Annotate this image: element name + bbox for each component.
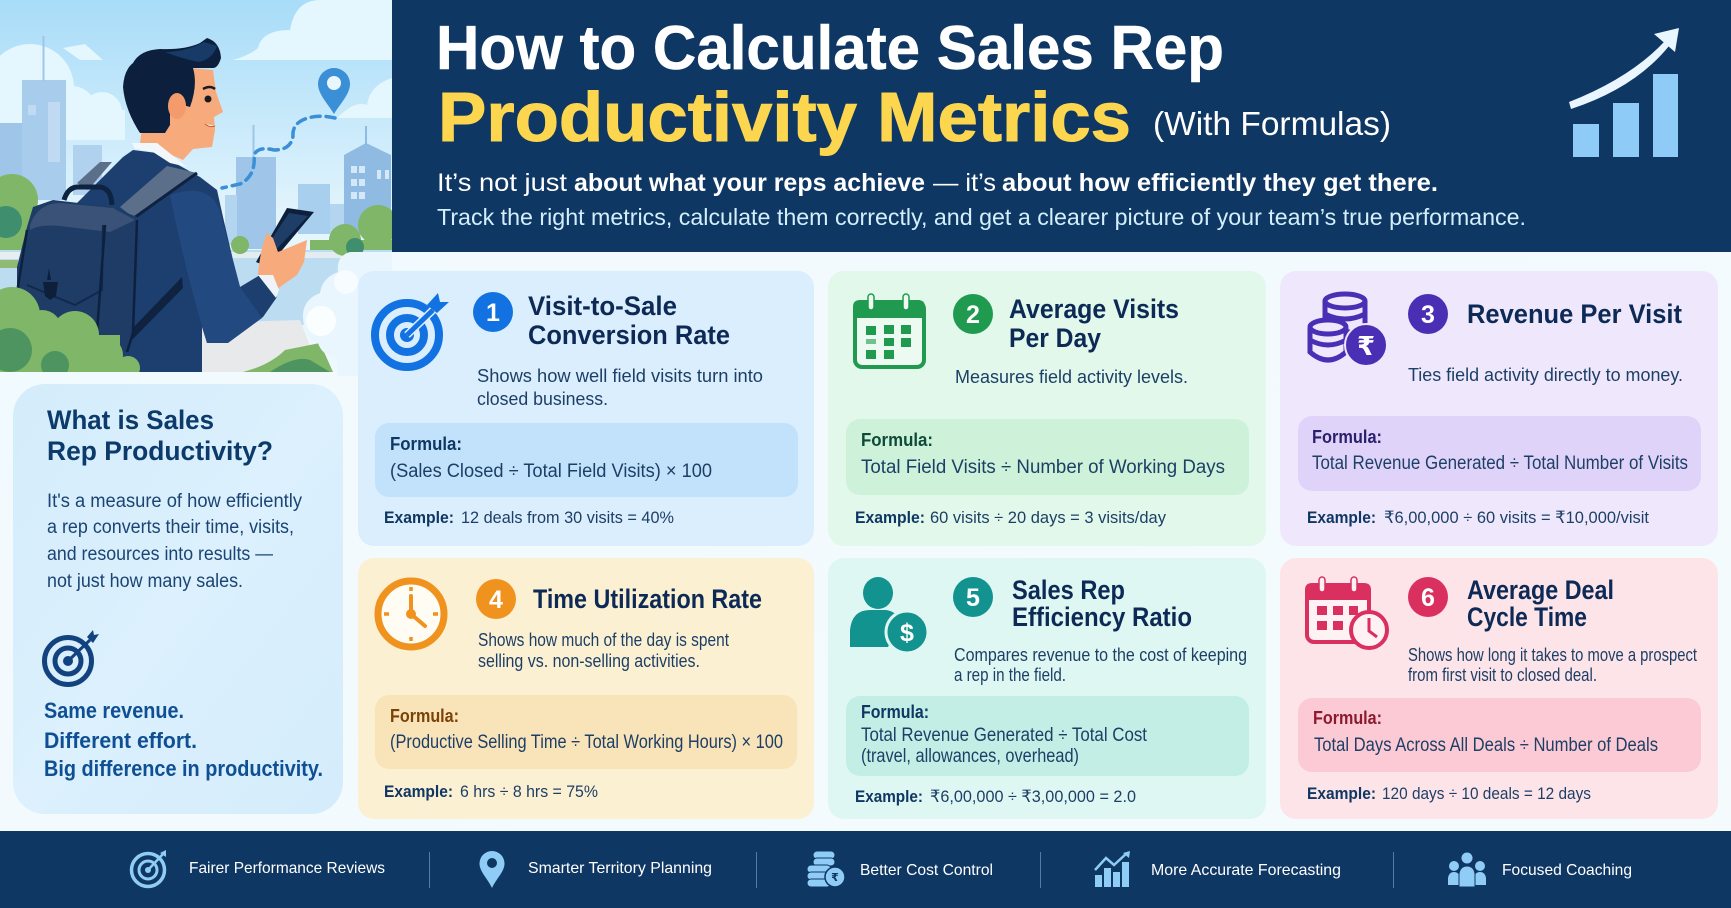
card title: Visit-to-Sale	[528, 291, 677, 321]
number badge 2	[953, 294, 993, 334]
card description: a rep in the field.	[954, 665, 1066, 685]
card title: Sales Rep	[1012, 575, 1125, 605]
formula box: Formula:	[1312, 427, 1382, 447]
number badge 6	[1408, 577, 1448, 617]
footer item: smarter territory planning: Smarter Territory Planning	[528, 860, 712, 877]
card title: Conversion Rate	[528, 320, 730, 350]
formula box	[846, 696, 1249, 776]
formula box	[375, 423, 798, 497]
card description	[1408, 645, 1697, 685]
card title: Efficiency Ratio	[1012, 602, 1192, 632]
card title: Revenue Per Visit	[1467, 299, 1682, 329]
ground and water	[0, 250, 392, 325]
formula box: Total Days Across All Deals ÷ Number of Deals	[1314, 735, 1658, 756]
icon: person with dollar: $	[900, 619, 914, 647]
card title	[1012, 575, 1192, 632]
backpack	[17, 200, 140, 352]
footer bar	[0, 831, 1731, 908]
footer item: smarter territory planning	[480, 851, 712, 888]
example: Example:	[855, 787, 923, 806]
panel: card 2 average visits per day	[828, 271, 1266, 546]
example: 120 days ÷ 10 deals = 12 days	[1382, 784, 1591, 803]
panel: card 1 visit-to-sale	[358, 271, 814, 546]
panel: what is sales rep productivity	[13, 384, 343, 814]
formula box	[375, 695, 797, 769]
example: Example:	[384, 782, 453, 801]
panel: card 3 revenue per visit	[1280, 271, 1718, 546]
title suffix: (With Formulas)	[1153, 105, 1391, 142]
number badge 4: 4	[489, 586, 503, 614]
panel heading: What is Sales	[47, 405, 214, 435]
example: 6 hrs ÷ 8 hrs = 75%	[460, 782, 598, 801]
card description	[477, 366, 763, 409]
hair	[123, 38, 221, 133]
formula box: Formula:	[861, 702, 929, 722]
card title: Cycle Time	[1467, 602, 1587, 632]
footer item: better cost control: ₹	[831, 872, 839, 884]
panel description: not just how many sales.	[47, 571, 243, 592]
card description	[954, 645, 1247, 685]
card title: Average Visits	[1009, 294, 1179, 324]
hand and cuff	[258, 233, 307, 289]
card description: Compares revenue to the cost of keeping	[954, 645, 1247, 665]
formula box: (Sales Closed ÷ Total Field Visits) × 100	[390, 461, 712, 482]
icon: coins with rupee: ₹	[1357, 331, 1375, 361]
subtitle line 1: — it’s	[933, 169, 996, 197]
number badge 3: 3	[1421, 301, 1435, 329]
panel description: It's a measure of how efficiently	[47, 491, 302, 512]
footer item: fairer performance reviews	[132, 850, 385, 886]
panel takeaway: Different effort.	[44, 728, 197, 753]
subtitle line 1	[437, 169, 1438, 197]
formula box	[1298, 698, 1701, 772]
subtitle line 1: It’s not just	[437, 169, 567, 197]
number badge 5: 5	[966, 584, 980, 612]
formula box: Total Revenue Generated ÷ Total Number of Visits	[1312, 453, 1688, 474]
formula box: Formula:	[861, 430, 933, 450]
location pin	[318, 68, 350, 114]
neck and face	[140, 68, 223, 160]
example: ₹6,00,000 ÷ ₹3,00,000 = 2.0	[930, 787, 1136, 806]
card description: Shows how much of the day is spent	[478, 630, 729, 650]
number badge 2: 2	[966, 301, 980, 329]
number badge 1	[473, 292, 513, 332]
suit body	[60, 150, 277, 372]
card title: Average Deal	[1467, 575, 1614, 605]
footer item: focused coaching	[1448, 852, 1632, 887]
bushes	[0, 174, 398, 256]
example: 60 visits ÷ 20 days = 3 visits/day	[930, 508, 1166, 527]
icon: growth chart	[1569, 28, 1679, 157]
card title: Per Day	[1009, 323, 1101, 353]
illustration: sales rep in city	[0, 0, 398, 380]
card description	[478, 630, 729, 671]
buildings	[0, 36, 391, 249]
panel heading	[47, 405, 273, 466]
icon: coins with rupee	[1310, 294, 1387, 366]
icon: calendar with clock	[1305, 577, 1387, 648]
panel takeaway	[44, 698, 323, 781]
example: ₹6,00,000 ÷ 60 visits = ₹10,000/visit	[1384, 508, 1649, 527]
card description: selling vs. non-selling activities.	[478, 651, 700, 671]
footer item: better cost control: Better Cost Control	[860, 862, 993, 879]
title line 2: Productivity Metrics	[438, 78, 1131, 156]
card title	[1467, 575, 1614, 632]
example: Example:	[1307, 784, 1376, 803]
footer item: better cost control	[807, 851, 993, 887]
formula box: Formula:	[1313, 708, 1382, 728]
phone	[256, 208, 314, 267]
card title: Time Utilization Rate	[533, 584, 762, 614]
panel: card 6 deal cycle time	[1280, 558, 1718, 819]
example	[1307, 784, 1591, 803]
footer item: focused coaching: Focused Coaching	[1502, 862, 1632, 879]
panel takeaway: Same revenue.	[44, 698, 184, 723]
card description: from first visit to closed deal.	[1408, 665, 1597, 685]
icon: calendar	[853, 294, 925, 367]
formula box: (travel, allowances, overhead)	[861, 746, 1079, 767]
card description: Ties field activity directly to money.	[1408, 365, 1683, 385]
panel: card 5 efficiency ratio	[828, 558, 1266, 819]
example: Example:	[1307, 508, 1376, 527]
icon: clock	[378, 581, 444, 647]
formula box	[1298, 416, 1701, 491]
example	[384, 782, 598, 801]
number badge 3	[1408, 294, 1448, 334]
panel: card 4 time utilization	[358, 558, 814, 819]
footer item: fairer performance reviews: Fairer Performance Reviews	[189, 860, 385, 877]
number badge 1: 1	[486, 299, 500, 327]
title line 1: How to Calculate Sales Rep	[436, 14, 1224, 83]
example: Example:	[384, 508, 454, 527]
footer item: more accurate forecasting: More Accurate Forecasting	[1151, 862, 1341, 879]
formula box: (Productive Selling Time ÷ Total Working Hours) × 100	[390, 732, 783, 753]
foreground bushes	[0, 287, 333, 380]
cloud overlay bottom right of illustration	[303, 252, 392, 376]
header banner	[392, 0, 1731, 252]
number badge 4	[476, 579, 516, 619]
route dashed line	[222, 116, 335, 188]
subtitle line 2: Track the right metrics, calculate them correctly, and get a clearer picture of your team’s true performance.	[437, 204, 1526, 230]
panel description	[47, 491, 302, 592]
footer item: more accurate forecasting	[1095, 851, 1341, 887]
subtitle line 1: about what your reps achieve	[574, 169, 925, 197]
panel description: a rep converts their time, visits,	[47, 517, 294, 538]
number badge 5	[953, 577, 993, 617]
formula box: Total Field Visits ÷ Number of Working Days	[861, 457, 1225, 478]
example: 12 deals from 30 visits = 40%	[461, 508, 674, 527]
formula box	[846, 419, 1249, 495]
icon: small target	[44, 630, 99, 684]
example: Example:	[855, 508, 925, 527]
card title	[528, 291, 730, 350]
subtitle line 1: about how efficiently they get there.	[1002, 169, 1438, 197]
card description: Shows how well field visits turn into	[477, 366, 763, 386]
formula box: Formula:	[390, 706, 459, 726]
card description: closed business.	[477, 389, 608, 409]
icon: target	[375, 293, 449, 367]
panel heading: Rep Productivity?	[47, 436, 273, 466]
formula box: Formula:	[390, 434, 462, 454]
formula box: Total Revenue Generated ÷ Total Cost	[861, 725, 1148, 746]
card title	[1009, 294, 1179, 353]
panel description: and resources into results —	[47, 544, 273, 565]
backpack straps	[120, 166, 197, 218]
icon: person with dollar	[850, 577, 928, 653]
number badge 6: 6	[1421, 584, 1435, 612]
card description: Measures field activity levels.	[955, 367, 1188, 387]
panel takeaway: Big difference in productivity.	[44, 756, 323, 781]
